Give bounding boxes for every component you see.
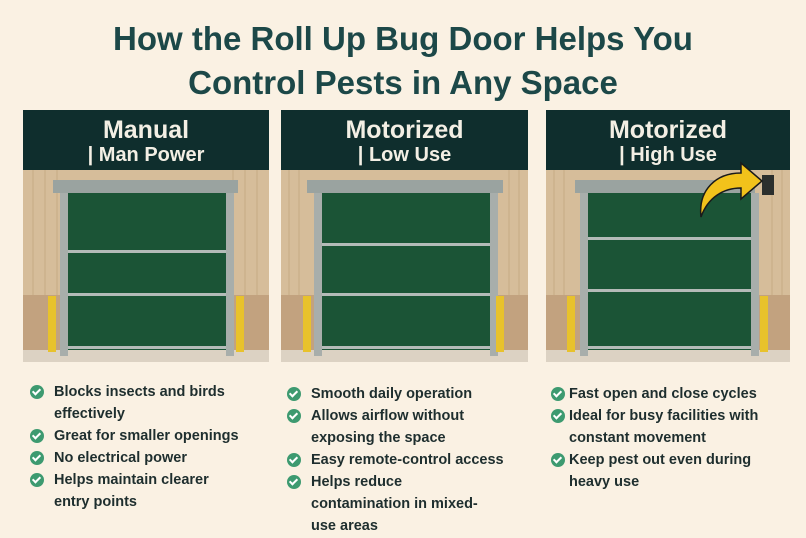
icon: yellow arrow: [700, 162, 763, 218]
title: [113, 20, 693, 101]
panel: motorized high use: [546, 110, 790, 362]
header: high use: | High Use: [619, 144, 717, 166]
header: low use: [281, 110, 528, 170]
bullets: high use: Keep pest out even during: [569, 452, 751, 468]
bullets: high use: constant movement: [569, 430, 706, 446]
bullets: low use: contamination in mixed-: [311, 496, 478, 512]
title: Control Pests in Any Space: [188, 64, 618, 101]
bullets: manual: Great for smaller openings: [54, 428, 239, 444]
bullets: low use: Allows airflow without: [311, 408, 464, 424]
bullets: manual: No electrical power: [54, 450, 187, 466]
header: low use: | Low Use: [358, 144, 451, 166]
bullets: low use: Helps reduce: [311, 474, 402, 490]
bullets: high use: heavy use: [569, 474, 639, 490]
bullets: low use: Easy remote-control access: [311, 452, 504, 468]
bullets: high use: [551, 386, 758, 490]
header: manual: [23, 110, 269, 170]
bullets: high use: Fast open and close cycles: [569, 386, 757, 402]
header: high use: [546, 110, 790, 170]
panel: manual: [23, 110, 269, 362]
title: How the Roll Up Bug Door Helps You: [113, 20, 693, 57]
door image: low use: [281, 170, 528, 362]
bullets: low use: [287, 386, 504, 534]
header: low use: Motorized: [345, 116, 464, 144]
door image: manual: [23, 170, 269, 362]
bullets: low use: Smooth daily operation: [311, 386, 472, 402]
header: manual: | Man Power: [88, 144, 204, 166]
header: high use: Motorized: [609, 116, 727, 144]
bullets: manual: Helps maintain clearer: [54, 472, 209, 488]
bullets: manual: effectively: [54, 406, 125, 422]
bullets: high use: Ideal for busy facilities with: [569, 408, 758, 424]
header: manual: Manual: [103, 116, 189, 144]
bullets: manual: [30, 384, 239, 510]
bullets: manual: entry points: [54, 494, 137, 510]
bullets: manual: Blocks insects and birds: [54, 384, 225, 400]
bullets: low use: exposing the space: [311, 430, 446, 446]
panel: motorized low use: [281, 110, 528, 362]
door image: high use: [546, 170, 790, 362]
bullets: low use: use areas: [311, 518, 378, 534]
